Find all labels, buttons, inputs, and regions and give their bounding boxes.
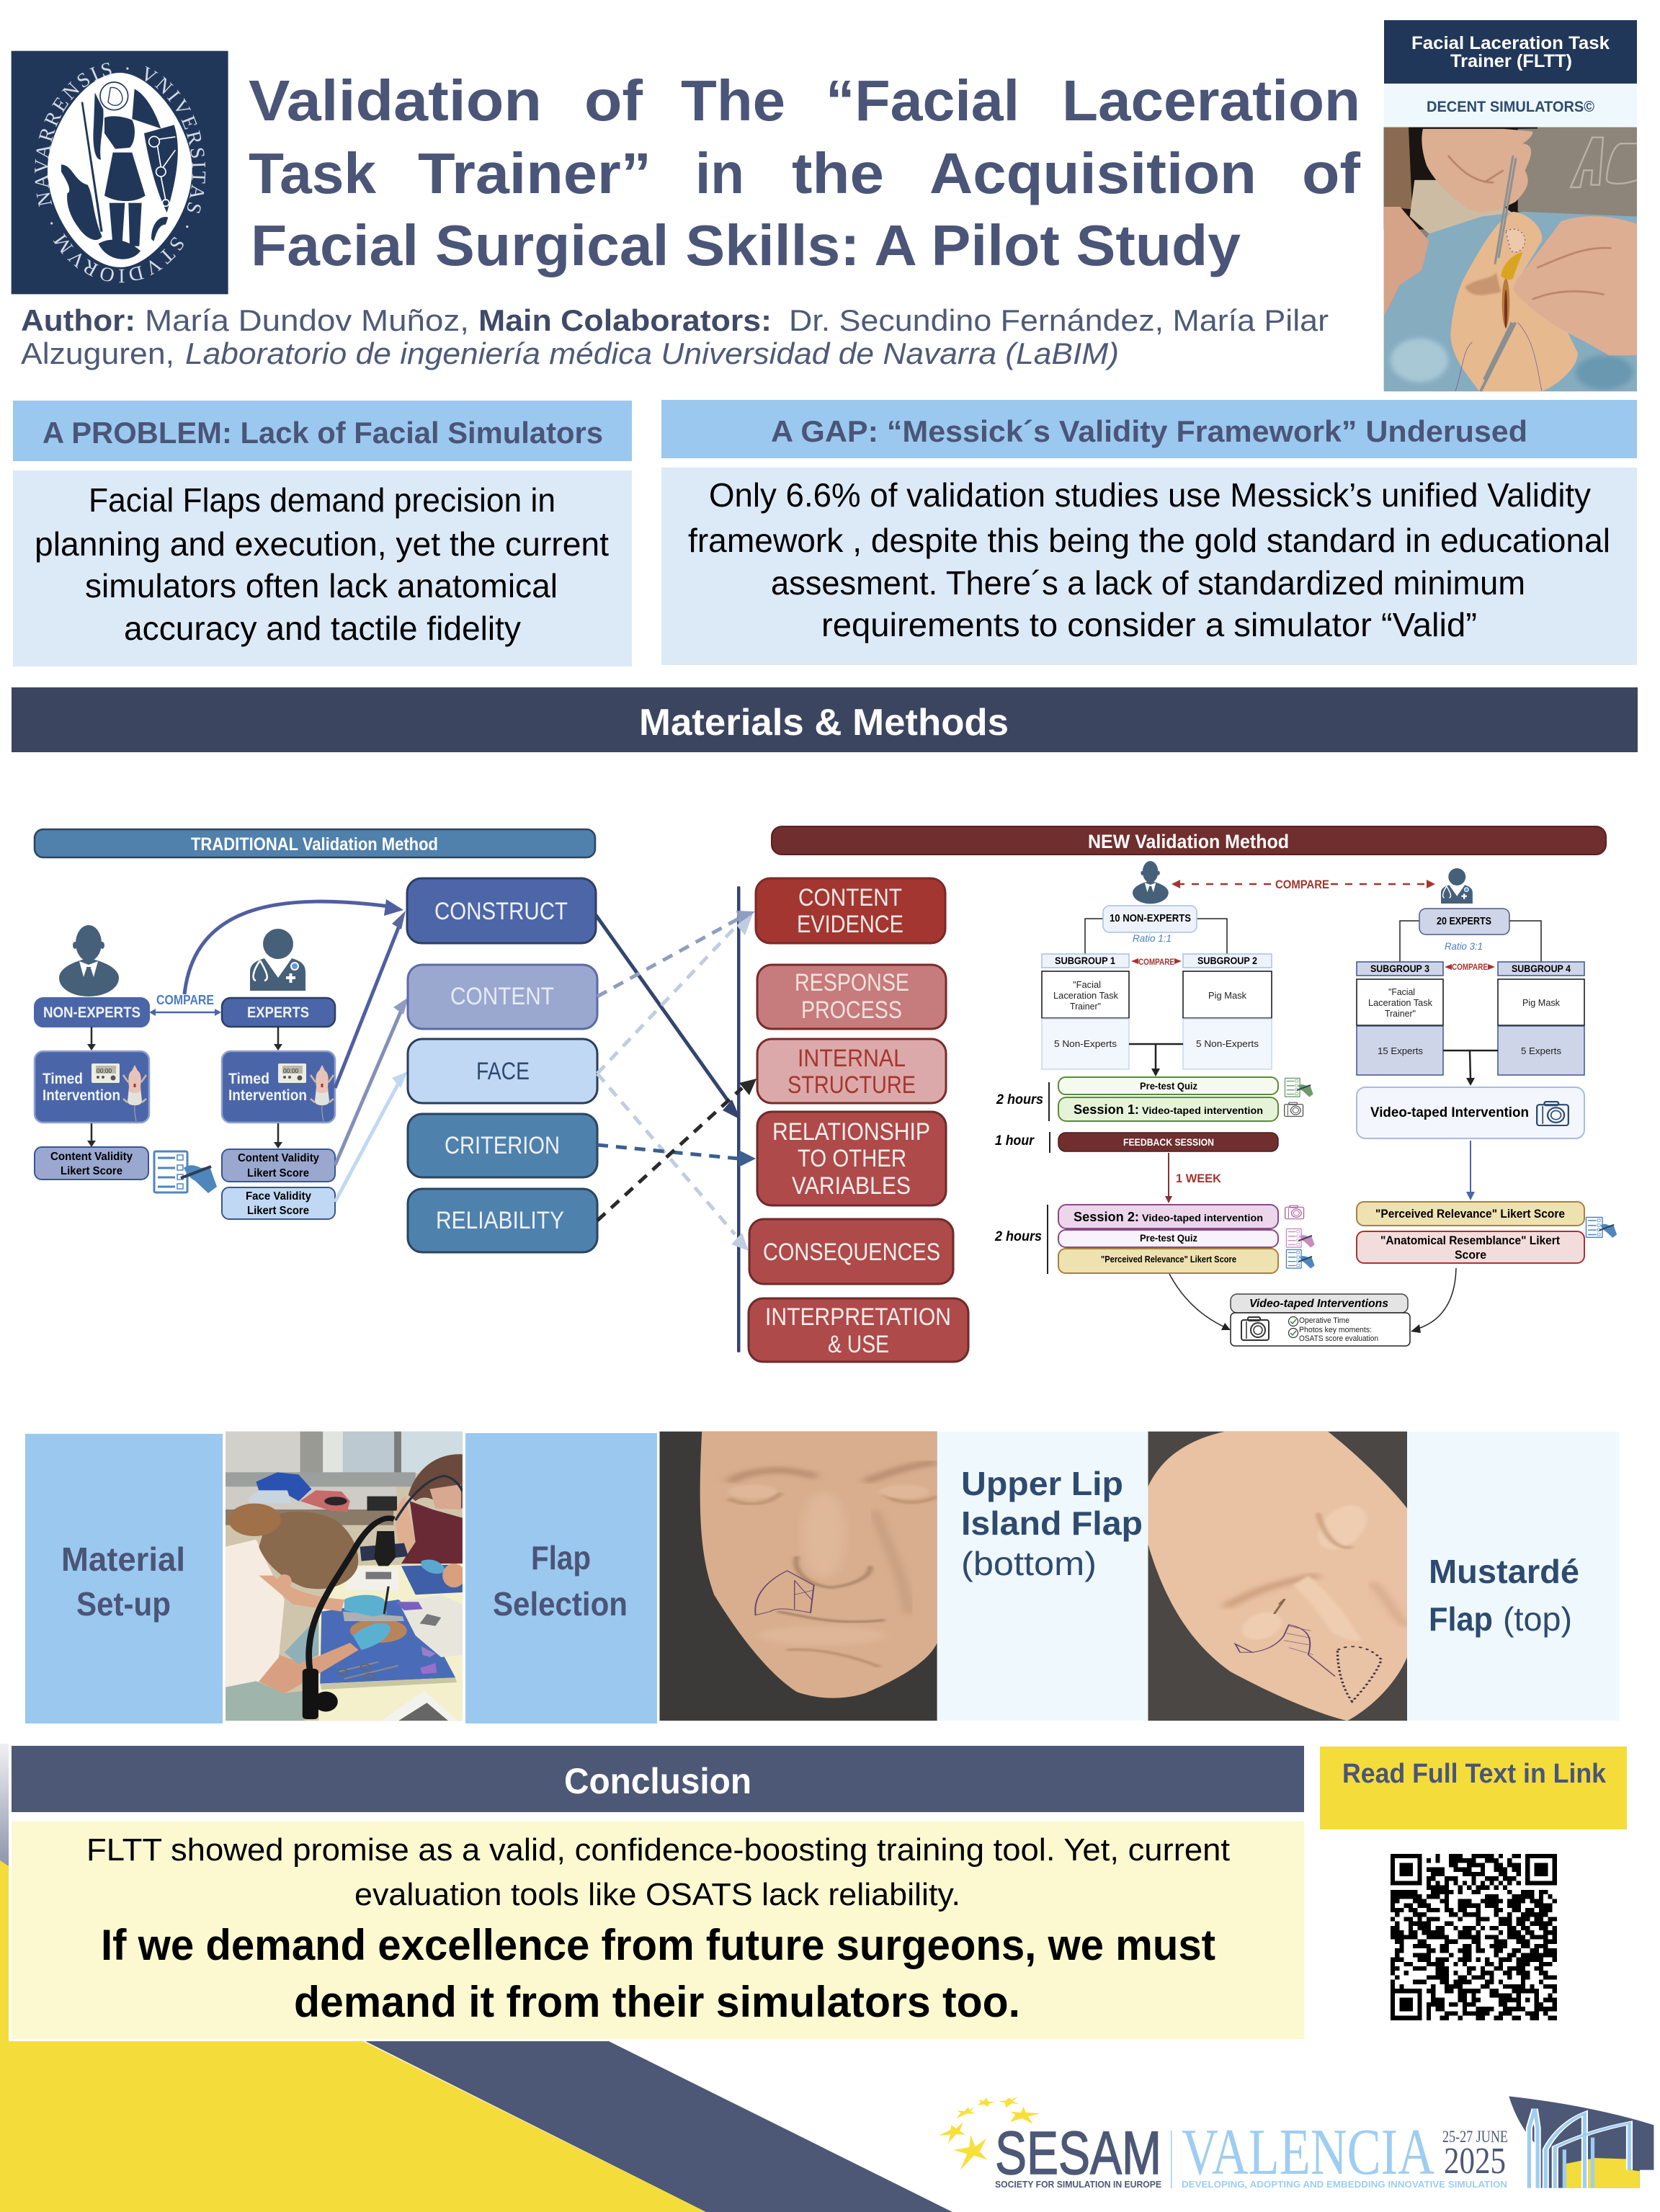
blue arrow to likert scores [1466, 1141, 1475, 1200]
problem heading [13, 401, 632, 461]
interpretation and use: & USE [828, 1331, 889, 1358]
construct: CONSTRUCT [434, 898, 568, 925]
icon: camera [1241, 1317, 1269, 1340]
conclusion heading [9, 1744, 1304, 2041]
icon: green checklist [1285, 1078, 1313, 1097]
panel: material set-up: Material [61, 1540, 185, 1578]
internal structure: STRUCTURE [787, 1071, 916, 1099]
icon: checklist and hand [154, 1151, 217, 1193]
face [408, 1039, 597, 1103]
non-experts box: NON-EXPERTS [43, 1004, 140, 1021]
photo: material set-up at table [226, 1432, 465, 1721]
card heading [1411, 33, 1610, 71]
traditional validation method heading [35, 829, 595, 857]
construct [407, 878, 596, 943]
pre-test quiz session 2: Pre-test Quiz [1140, 1233, 1197, 1244]
compare subgroup 1 and 2: COMPARE [1138, 957, 1174, 967]
panel: upper lip island flap: Upper Lip [961, 1465, 1123, 1502]
video-taped interventions box [1231, 1294, 1410, 1346]
materials and methods banner [12, 687, 1638, 752]
internal structure [757, 1039, 946, 1103]
author line: Main Colaborators: [478, 303, 772, 337]
sesam wordmark: SESAM [995, 2119, 1161, 2187]
gap text: Only 6.6% of validation studies use Messick’s unified Validity [709, 476, 1591, 514]
subgroup 1 column: SUBGROUP 1 [1055, 955, 1115, 966]
panel: flap selection [465, 1433, 657, 1723]
panel: upper lip island flap: Island Flap [961, 1504, 1143, 1542]
conclusion text [12, 1821, 1304, 2039]
panel: mustardé flap: (top) [1503, 1600, 1572, 1638]
card subheading: DECENT SIMULATORS© [1427, 99, 1594, 115]
title: Acquisition [929, 141, 1257, 205]
video-taped interventions box: OSATS score evaluation [1299, 1334, 1378, 1343]
title: of [1302, 141, 1360, 205]
conclusion text: evaluation tools like OSATS lack reliability. [354, 1877, 960, 1912]
compare arrow [149, 993, 221, 1016]
face validity score: Likert Score [247, 1205, 309, 1217]
session 1 [1058, 1097, 1278, 1121]
criterion: CRITERION [445, 1132, 560, 1159]
conclusion text: If we demand excellence from future surgeons, we must [101, 1921, 1215, 1969]
icon: mini expert [1441, 868, 1473, 904]
video-taped interventions box: Photos key moments: [1299, 1326, 1372, 1334]
timed intervention non-experts [35, 1051, 149, 1123]
session 1: Session 1: [1074, 1102, 1139, 1117]
icon: camera [1537, 1102, 1568, 1125]
subgroup 3 column: SUBGROUP 3 [1370, 963, 1429, 974]
read full text callout: Read Full Text in Link [1342, 1759, 1607, 1789]
20 experts box: 20 EXPERTS [1437, 915, 1491, 927]
timed intervention experts: Timed [228, 1071, 269, 1087]
university of navarra logo: NAVARRENSIS · VNIVERSITAS · STVDIORVM · [35, 63, 206, 282]
criterion [408, 1114, 597, 1177]
anatomical resemblance score: "Anatomical Resemblance" Likert [1380, 1234, 1560, 1247]
problem text: simulators often lack anatomical [85, 567, 558, 605]
subgroup 1 column: Laceration Task [1053, 991, 1119, 1001]
icon: stopwatch [278, 1063, 306, 1083]
gap text: requirements to consider a simulator “Valid” [821, 606, 1477, 643]
subgroup 2 column: Pig Mask [1208, 991, 1247, 1001]
dashed compare arrow [1172, 878, 1435, 891]
problem heading: A PROBLEM: Lack of Facial Simulators [43, 416, 603, 450]
relationship to other variables: VARIABLES [792, 1172, 911, 1200]
icon: blue checklist [1286, 1249, 1315, 1269]
one week arrow [1165, 1153, 1222, 1203]
subgroup 1 column: "Facial [1073, 980, 1101, 990]
icon: stopwatch: 00:00 [283, 1067, 299, 1074]
dashed compare arrow: COMPARE [1275, 878, 1329, 891]
content evidence [756, 878, 945, 943]
subgroup 2 column [1183, 954, 1272, 1069]
icon: mouse [311, 1065, 334, 1121]
10 non-experts box [1103, 906, 1197, 932]
content: CONTENT [450, 983, 554, 1010]
pre-test quiz session 2 [1058, 1230, 1278, 1247]
session 1: Video-taped intervention [1142, 1105, 1263, 1116]
session 2: Video-taped intervention [1142, 1212, 1263, 1223]
conclusion text: demand it from their simulators too. [294, 1978, 1020, 2026]
non-experts box [35, 998, 149, 1027]
icon: stopwatch: 00:00 [97, 1067, 112, 1074]
subgroup 3 column: 15 Experts [1378, 1045, 1423, 1056]
one week arrow: 1 WEEK [1176, 1172, 1222, 1185]
decorative navy background wedge [365, 2041, 952, 2212]
content validity score experts [222, 1149, 335, 1182]
icon: gray camera [1285, 1102, 1303, 1116]
ratio 3:1: Ratio 3:1 [1445, 940, 1483, 952]
arrow: face score to face [335, 1071, 408, 1202]
consequences: CONSEQUENCES [763, 1239, 940, 1266]
timed intervention non-experts: Timed [43, 1071, 83, 1087]
problem text: planning and execution, yet the current [35, 525, 609, 563]
divider [1171, 2131, 1172, 2188]
icon: pink checklist [1286, 1228, 1315, 1248]
video-taped interventions box: Video-taped Interventions [1249, 1298, 1388, 1310]
author line: Author: [21, 303, 135, 337]
building icon [1509, 2096, 1654, 2188]
session 2: Session 2: [1074, 1210, 1139, 1224]
subgroup 1 column: Trainer" [1070, 1002, 1101, 1012]
sesam logo [939, 2096, 1654, 2190]
problem text [13, 471, 632, 666]
arrows within traditional flow [87, 1027, 282, 1149]
relationship to other variables: TO OTHER [798, 1145, 906, 1172]
icon: mini non-expert [1133, 861, 1169, 904]
feedback session [1058, 1133, 1278, 1151]
conference tagline: DEVELOPING, ADOPTING AND EMBEDDING INNOVATIVE SIMULATION [1182, 2179, 1507, 2190]
problem text: accuracy and tactile fidelity [124, 610, 521, 647]
icon: mouse [123, 1065, 146, 1121]
dashed arrow: face to content evidence [597, 914, 753, 1074]
reliability [408, 1189, 597, 1252]
validity construct boxes [407, 878, 597, 1252]
icon: stopwatch [92, 1063, 120, 1083]
content validity score experts: Content Validity [238, 1152, 319, 1164]
panel: flap selection: Selection [493, 1585, 628, 1623]
content validity score non-experts: Content Validity [50, 1151, 133, 1163]
author line: María Dundov Muñoz, [145, 303, 469, 337]
icon: expert doctor [250, 929, 305, 991]
conclusion heading: Conclusion [564, 1761, 751, 1801]
anatomical resemblance score: Score [1455, 1248, 1486, 1262]
photo: mustardé flap mask [1148, 1432, 1407, 1721]
face validity score [222, 1187, 335, 1219]
10 non-experts box: 10 NON-EXPERTS [1110, 912, 1191, 924]
reliability: RELIABILITY [436, 1207, 564, 1234]
experts box: EXPERTS [247, 1004, 309, 1021]
qr code [1391, 1854, 1557, 2020]
content evidence: EVIDENCE [797, 911, 903, 938]
perceived relevance experts: "Perceived Relevance" Likert Score [1375, 1207, 1565, 1221]
interpretation and use [749, 1298, 968, 1362]
curved arrows to video analysis [1169, 1268, 1456, 1329]
gap text [661, 468, 1637, 665]
20 experts box [1419, 909, 1509, 935]
panel: mustardé flap [1407, 1432, 1620, 1721]
experts box [222, 998, 335, 1027]
panel: upper lip island flap: (bottom) [961, 1545, 1097, 1582]
subgroup 3 column: "Facial [1388, 987, 1415, 997]
content validity score non-experts [35, 1147, 148, 1179]
timed intervention experts [222, 1051, 335, 1123]
relationship to other variables [757, 1112, 946, 1205]
dashed arrow: criterion to relationship [597, 1145, 756, 1167]
title [249, 68, 1360, 277]
title: the [792, 141, 884, 205]
timed intervention experts: Intervention [228, 1087, 307, 1104]
panel: mustardé flap: Mustardé [1429, 1553, 1579, 1590]
panel: flap selection: Flap [531, 1539, 591, 1577]
title: Trainer” [418, 141, 651, 205]
dashed arrow: content to content evidence [597, 911, 755, 996]
gap text: framework , despite this being the gold standard in educational [688, 522, 1610, 559]
title: in [695, 141, 744, 205]
pre-test quiz session 1: Pre-test Quiz [1140, 1081, 1197, 1092]
subgroup 4 column: Pig Mask [1522, 998, 1561, 1008]
subgroup 2 column: 5 Non-Experts [1196, 1038, 1259, 1049]
timed intervention non-experts: Intervention [43, 1087, 120, 1104]
card heading: Facial Laceration Task [1411, 33, 1610, 53]
panel: upper lip island flap [937, 1432, 1148, 1721]
sesam tagline: SOCIETY FOR SIMULATION IN EUROPE [995, 2179, 1161, 2190]
problem text: Facial Flaps demand precision in [89, 481, 555, 519]
subgroup 3 column: Laceration Task [1368, 998, 1433, 1008]
time labels: 2 hours [996, 1092, 1043, 1107]
anatomical resemblance score [1357, 1231, 1584, 1263]
perceived relevance experts [1357, 1202, 1584, 1226]
decorative yellow background wedge [0, 1860, 706, 2212]
new validation method heading [772, 826, 1606, 855]
photo: upper lip island flap mask [659, 1432, 937, 1721]
interpretation and use: INTERPRETATION [765, 1303, 951, 1331]
traditional validation method heading: TRADITIONAL Validation Method [191, 834, 438, 855]
panel: mustardé flap: Flap [1429, 1600, 1493, 1638]
dashed arrow: face to consequences [597, 1074, 749, 1251]
internal structure: INTERNAL [798, 1045, 906, 1072]
author line: Laboratorio de ingeniería médica Universidad de Navarra (LaBIM) [185, 336, 1119, 370]
arrow: content score to content [335, 997, 409, 1165]
subgroup 1 column: 5 Non-Experts [1054, 1038, 1117, 1049]
compare subgroup 3 and 4: COMPARE [1452, 962, 1488, 972]
valencia wordmark: VALENCIA [1182, 2115, 1434, 2188]
arrow: timed to construct [335, 911, 406, 1088]
response process: PROCESS [801, 996, 902, 1024]
content validity score experts: Likert Score [247, 1167, 309, 1179]
subgroup 4 column: SUBGROUP 4 [1512, 963, 1571, 974]
video-taped interventions box: Operative Time [1299, 1316, 1349, 1325]
title: “Facial [826, 68, 1019, 133]
consequences [749, 1219, 953, 1284]
materials and methods banner: Materials & Methods [639, 702, 1009, 744]
content validity score non-experts: Likert Score [61, 1165, 122, 1177]
new validation method heading: NEW Validation Method [1088, 831, 1289, 852]
subgroup 3 column [1357, 962, 1443, 1075]
time labels [994, 1082, 1050, 1274]
date: 25-27 JUNE [1442, 2128, 1508, 2146]
video-taped intervention box [1357, 1087, 1584, 1138]
year: 2025 [1444, 2141, 1506, 2182]
curved arrow from compare to construct [184, 899, 403, 994]
decorative gray strip at left edge [0, 1744, 9, 1866]
arrow: construct to relationship [596, 915, 741, 1120]
gap heading [661, 400, 1637, 458]
video-taped intervention box: Video-taped Intervention [1370, 1105, 1529, 1120]
author line: Dr. Secundino Fernández, María Pilar [789, 303, 1329, 337]
ratio 1:1: Ratio 1:1 [1133, 932, 1172, 944]
perceived relevance session 2 [1058, 1249, 1278, 1273]
icon: pink camera [1285, 1205, 1304, 1219]
merge arrows from subgroups [1129, 1044, 1498, 1086]
photo: suturing on simulator [1384, 127, 1637, 391]
vertical divider line [737, 886, 741, 1352]
group connectors [1085, 919, 1541, 962]
title: Validation [249, 68, 542, 133]
panel: a gap [661, 400, 1637, 665]
read full text callout [1320, 1747, 1627, 1829]
compare arrow: COMPARE [156, 993, 214, 1007]
face: FACE [476, 1058, 530, 1085]
messick evidence boxes [749, 878, 968, 1362]
subgroup 3 column: Trainer" [1385, 1009, 1416, 1019]
response process: RESPONSE [795, 969, 909, 996]
subgroup 2 column: SUBGROUP 2 [1197, 955, 1257, 966]
card: facial laceration task trainer [1384, 20, 1637, 391]
time labels: 2 hours [994, 1229, 1042, 1244]
panel: material set-up [25, 1434, 223, 1723]
title: The [681, 68, 785, 133]
panel: a problem [13, 401, 632, 666]
gap heading: A GAP: “Messick´s Validity Framework” Underused [771, 414, 1527, 448]
panel: material set-up: Set-up [76, 1585, 171, 1623]
icon: checklist experts [1586, 1217, 1617, 1238]
gap text: assesment. There´s a lack of standardized minimum [771, 564, 1525, 602]
subgroup 1 column [1042, 954, 1129, 1069]
title: Laceration [1062, 68, 1360, 133]
stars [939, 2097, 1040, 2170]
content [408, 965, 597, 1029]
perceived relevance session 2: "Perceived Relevance" Likert Score [1101, 1254, 1236, 1265]
title: of [584, 68, 643, 133]
dashed arrow: reliability to internal structure [597, 1079, 757, 1221]
response process [757, 965, 946, 1029]
session 2 [1058, 1205, 1278, 1228]
face validity score: Face Validity [246, 1190, 311, 1203]
content evidence: CONTENT [798, 884, 902, 911]
conclusion text: FLTT showed promise as a valid, confidence-boosting training tool. Yet, current [86, 1832, 1230, 1868]
author line [21, 303, 1329, 370]
subgroup 4 column [1498, 962, 1584, 1075]
title: Task [249, 141, 377, 205]
time labels: 1 hour [995, 1133, 1035, 1149]
subgroup 4 column: 5 Experts [1521, 1045, 1562, 1056]
card heading: Trainer (FLTT) [1450, 51, 1572, 71]
title: Facial Surgical Skills: A Pilot Study [251, 213, 1241, 277]
feedback session: FEEDBACK SESSION [1123, 1137, 1214, 1148]
curved arrow heads [1221, 1323, 1421, 1333]
pre-test quiz session 1 [1058, 1077, 1278, 1094]
author line: Alzuguren, [21, 336, 174, 370]
relationship to other variables: RELATIONSHIP [772, 1118, 930, 1146]
icon: non-expert person [59, 925, 119, 996]
